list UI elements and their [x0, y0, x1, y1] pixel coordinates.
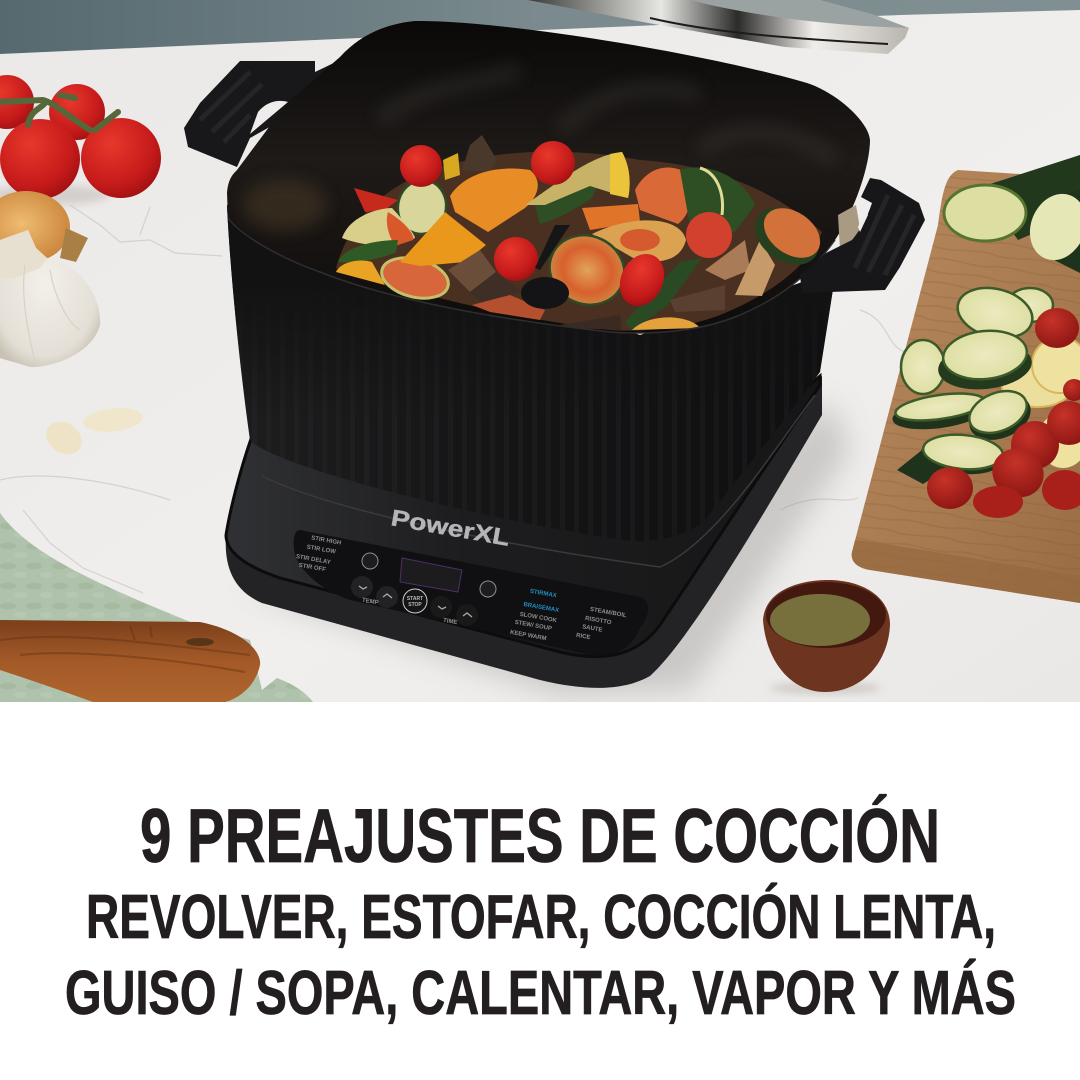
preset labels: STEAM/BOIL [589, 607, 627, 619]
preset labels: RISOTTO [585, 616, 612, 626]
temp and time labels: STOP [408, 602, 422, 608]
left handle [184, 60, 340, 167]
dark strip [625, 258, 702, 330]
preset labels: RICE [576, 633, 591, 641]
appliance base [226, 376, 822, 688]
stir paddle and knob [535, 225, 570, 270]
onion [0, 191, 88, 263]
stir labels: STIR LOW [306, 545, 336, 556]
stir labels: STIR DELAY [295, 554, 331, 566]
vegetables on board [890, 155, 1080, 518]
control panel glass [294, 530, 648, 656]
preset labels: STIRMAX [529, 589, 557, 599]
tomatoes on the vine [0, 75, 161, 205]
digital display [400, 558, 462, 592]
temp and time labels: TIME [443, 618, 458, 626]
preset labels: SAUTE [582, 624, 603, 634]
temp and time labels: TEMP [361, 598, 379, 606]
preset labels: KEEP WARM [509, 630, 547, 642]
mushroom [462, 135, 497, 172]
wooden bowl with herbs [763, 580, 890, 694]
tea towel [0, 513, 313, 702]
subtitle [65, 883, 1016, 1028]
zucchini with sauce [635, 167, 692, 224]
food: ratatouille [336, 135, 830, 331]
garlic bulb [0, 230, 100, 367]
cherry tomatoes [400, 145, 442, 187]
white caption panel [0, 702, 1080, 1080]
pot interior [227, 21, 870, 333]
yellow squash [336, 260, 385, 285]
stir labels: STIR OFF [298, 563, 326, 573]
preset labels: BRAISEMAX [523, 602, 559, 614]
pot body [227, 205, 836, 541]
buttons [362, 553, 496, 613]
zucchini slices left [394, 176, 450, 238]
right handle [800, 178, 925, 293]
cutting board [852, 170, 1080, 603]
PowerXL logo: PowerXL [389, 504, 512, 551]
red pepper [354, 188, 398, 212]
pot shadow on counter [240, 400, 850, 695]
dark zucchini [535, 183, 598, 224]
eggplant [705, 240, 750, 280]
temp and time labels: START [407, 596, 423, 602]
stir labels [295, 535, 342, 573]
bottom pieces [632, 317, 700, 330]
preset labels: STEW/ SOUP [514, 620, 552, 632]
garlic cloves [40, 405, 144, 461]
orange squash strip [582, 204, 640, 230]
stainless lid [528, 0, 909, 54]
steam and reflections [243, 70, 835, 231]
yellow pepper [400, 212, 486, 266]
temp and time labels [361, 596, 458, 626]
big orange squash [450, 168, 538, 232]
background wall strip [0, 0, 1080, 702]
wooden spoon [0, 620, 260, 702]
marble countertop [0, 10, 1080, 702]
stir labels: STIR HIGH [311, 535, 342, 547]
right zucchini [744, 195, 830, 277]
photo: kitchen scene [0, 0, 1080, 702]
preset labels: SLOW COOK [519, 612, 558, 624]
pot front rim line [228, 218, 835, 333]
preset labels [509, 589, 627, 642]
